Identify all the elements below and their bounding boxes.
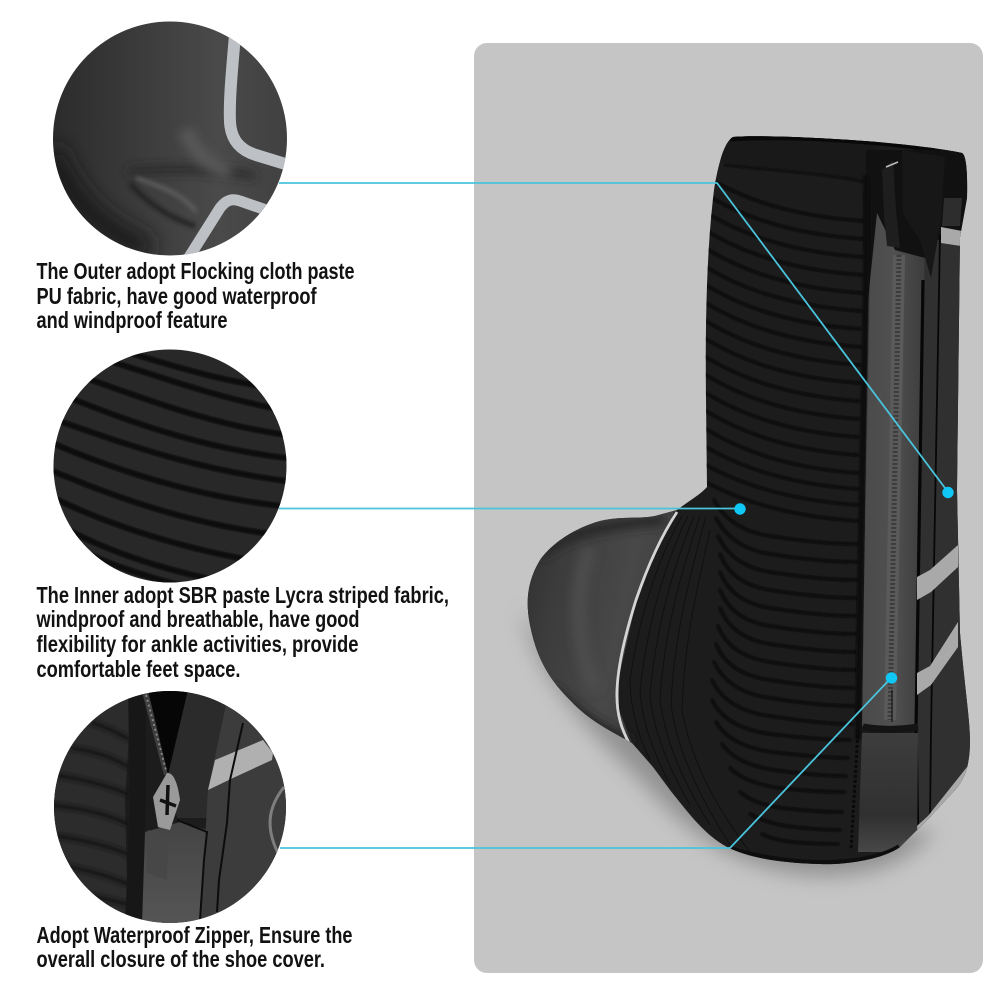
- white binding stripe: [617, 512, 677, 745]
- leader: inner fabric: [279, 508, 740, 510]
- curved reflective edge: [270, 787, 284, 853]
- ground shadow under shoe: [522, 610, 935, 876]
- reflective stripes: [899, 227, 967, 850]
- dot: inner fabric: [734, 503, 746, 515]
- shoe base fabric: [520, 130, 980, 870]
- zipper teeth: [146, 695, 166, 770]
- ribbed fabric left: [54, 698, 132, 915]
- text: inner fabric: windproof and breathable, have good: [36, 606, 360, 632]
- grey panel right: [200, 706, 286, 919]
- collar: [720, 136, 877, 159]
- collar seam: [724, 165, 866, 182]
- fuzzy seam left of zipper: [858, 175, 866, 740]
- fabric base: [50, 18, 290, 258]
- zipper opening: [148, 690, 188, 775]
- circle: inner ribbed fabric closeup: [50, 345, 295, 588]
- reflective strip: [208, 740, 273, 790]
- dot: zipper: [886, 672, 897, 684]
- dark strap near top: [942, 198, 962, 226]
- reflective strip lower: [184, 194, 266, 254]
- right side panel: [918, 240, 970, 828]
- text: outer fabric: PU fabric, have good waterproof: [36, 283, 317, 309]
- woven zipper tape: [168, 690, 228, 818]
- lower zipper garage: [851, 727, 918, 852]
- stitching lines: [177, 723, 243, 920]
- text: inner fabric: comfortable feet space.: [36, 656, 240, 682]
- text: inner fabric: The Inner adopt SBR paste Lycra striped fabric,: [36, 582, 449, 608]
- ankle ribs: [706, 177, 864, 844]
- zipper fabric strip: [862, 213, 925, 726]
- base: [50, 688, 290, 928]
- text: zipper: overall closure of the shoe cover.: [36, 946, 325, 972]
- shoe cover photo: [520, 130, 980, 870]
- text: zipper: Adopt Waterproof Zipper, Ensure the: [36, 922, 352, 948]
- leader: zipper: [280, 678, 891, 848]
- lower tape: [142, 822, 207, 925]
- text: outer fabric: [36, 258, 354, 333]
- text: inner fabric: [36, 582, 449, 682]
- text: outer fabric: and windproof feature: [36, 307, 228, 333]
- top rim: [730, 137, 965, 155]
- zipper flap: [924, 240, 938, 278]
- reflective strip upper: [230, 35, 292, 166]
- panel: product photo background: [474, 43, 983, 973]
- rib grooves: [50, 350, 295, 588]
- zipper pull: [882, 160, 900, 248]
- panel seam stitching: [916, 235, 940, 850]
- zipper tape left with teeth: [142, 692, 170, 775]
- fine heel ribs: [630, 516, 752, 855]
- circle: outer fabric closeup: [50, 18, 292, 262]
- text: zipper: [36, 922, 352, 972]
- leader lines: [279, 183, 948, 848]
- dot: outer fabric: [942, 487, 954, 498]
- zipper slider: [147, 773, 180, 880]
- fuzzy seam band: [125, 690, 146, 925]
- dark zipper backing: [870, 150, 968, 282]
- circle: zipper closeup: [54, 691, 286, 923]
- text: outer fabric: The Outer adopt Flocking cloth paste: [36, 258, 354, 284]
- fabric wrinkles: [50, 130, 255, 250]
- text: inner fabric: flexibility for ankle activities, provide: [36, 631, 358, 657]
- bottom hem: [730, 848, 900, 864]
- rib grooves left: [50, 722, 130, 905]
- ribbed base: [50, 345, 290, 587]
- leader: outer fabric: [279, 183, 948, 492]
- toe cap: [528, 510, 675, 744]
